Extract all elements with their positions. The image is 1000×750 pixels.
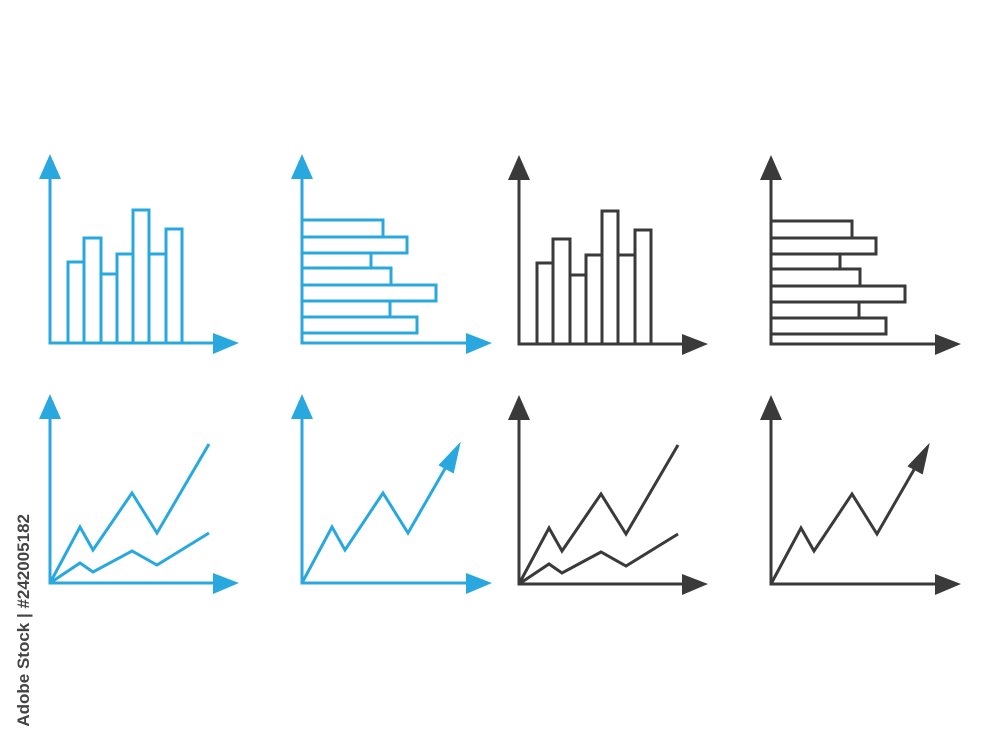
stock id text: Adobe Stock | #242005182: [14, 514, 33, 727]
icon: dark trend arrow chart: [760, 395, 961, 595]
icon: dark double line chart: [508, 395, 708, 595]
icon: dark vertical bar chart: [508, 155, 708, 355]
icon: blue horizontal bar chart: [291, 154, 492, 354]
icon: dark horizontal bar chart: [760, 155, 961, 355]
icon: blue trend arrow chart: [291, 394, 492, 594]
icon: blue vertical bar chart: [39, 154, 239, 354]
icon: blue double line chart: [39, 394, 239, 594]
